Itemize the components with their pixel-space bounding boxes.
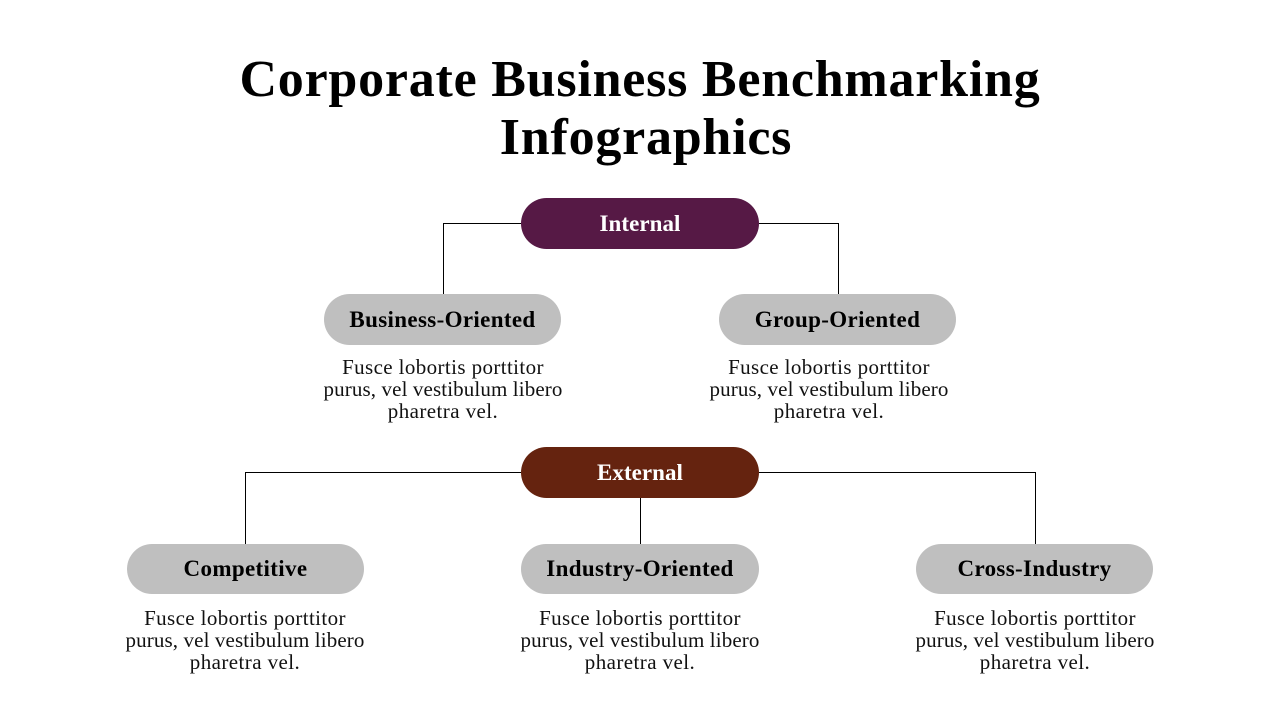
text: Group-Oriented description: pharetra vel. [774,399,884,423]
pill: Competitive: Competitive [184,556,307,581]
text: Industry-Oriented description: Fusce lobortis porttitor [539,606,741,630]
text: Competitive description: pharetra vel. [190,650,300,674]
title: Infographics [500,109,792,166]
text: Cross-Industry description: pharetra vel. [980,650,1090,674]
text: Competitive description [126,606,364,674]
text: Cross-Industry description [916,606,1154,674]
text: Industry-Oriented description: purus, vel vestibulum libero [520,628,760,652]
pill: Cross-Industry: Cross-Industry [957,556,1112,581]
text: Group-Oriented description [710,355,948,423]
text: Cross-Industry description: purus, vel vestibulum libero [916,628,1154,652]
text: Group-Oriented description: Fusce lobortis porttitor [728,355,930,379]
text: Business-Oriented description: pharetra vel. [388,399,498,423]
pill: Competitive [127,544,364,594]
text: Industry-Oriented description: pharetra vel. [585,650,695,674]
pill: Group-Oriented: Group-Oriented [755,307,920,332]
text: Business-Oriented description [324,355,562,423]
text: Industry-Oriented description [520,606,760,674]
title [239,51,1041,166]
pill: Business-Oriented: Business-Oriented [349,307,536,332]
text: Group-Oriented description: purus, vel vestibulum libero [710,377,948,401]
text: Business-Oriented description: Fusce lobortis porttitor [342,355,544,379]
pill: Business-Oriented [324,294,561,345]
text: Business-Oriented description: purus, vel vestibulum libero [324,377,562,401]
pill: Cross-Industry [916,544,1153,594]
text: Cross-Industry description: Fusce lobortis porttitor [934,606,1136,630]
pill: Internal [521,198,759,249]
pill: Industry-Oriented: Industry-Oriented [546,556,734,581]
text: Competitive description: Fusce lobortis porttitor [144,606,346,630]
pill: External: External [597,460,683,485]
pill: Internal: Internal [600,211,680,236]
pill: Industry-Oriented [521,544,759,594]
text: Competitive description: purus, vel vestibulum libero [126,628,364,652]
title: Corporate Business Benchmarking [239,51,1041,108]
pill: Group-Oriented [719,294,956,345]
pill: External [521,447,759,498]
